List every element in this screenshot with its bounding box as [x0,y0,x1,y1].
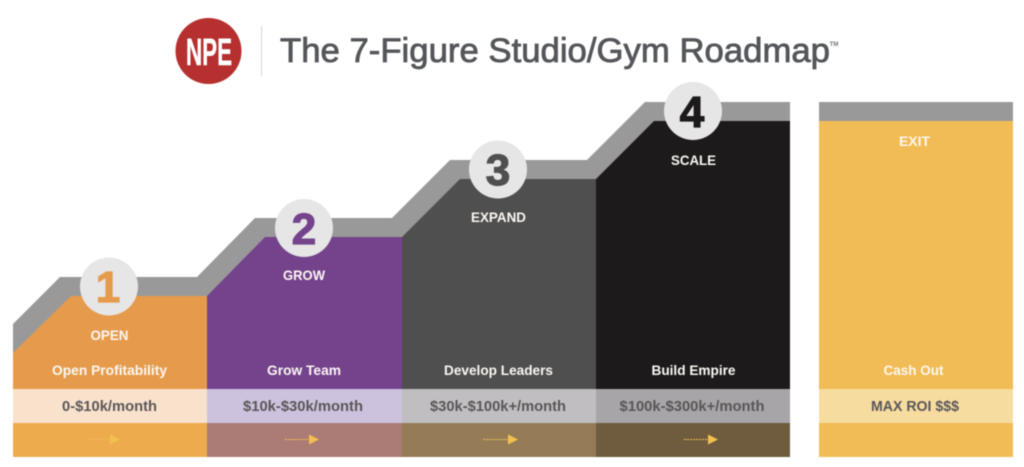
step 3 arrow row [402,423,596,457]
exit bottom row [819,423,1013,457]
step 3 subheading: Develop Leaders [444,362,553,378]
logo: NPE red circle: NPE [186,32,232,74]
panel: step 1 open [13,296,207,457]
step 3 revenue row [402,389,596,423]
exit grey cap [819,102,1013,121]
step 3 heading: EXPAND [471,209,526,225]
panel: exit [819,102,1013,457]
panel: step 2 grow [207,237,402,457]
step 3 main block [402,179,596,389]
title: The 7-Figure Studio/Gym Roadmap [280,32,830,70]
step 2 revenue: $10k-$30k/month [243,398,363,415]
step 4 revenue: $100k-$300k+/month [620,398,764,415]
staircase grey band [13,102,790,400]
step 2 revenue row [207,389,402,423]
step 2 arrow row [207,423,402,457]
badge: number 3 [469,140,527,198]
step 4 arrow [684,434,718,444]
step 1 main block [13,296,207,389]
exit main block [819,121,1013,389]
step 1 arrow row [13,423,207,457]
step 3 revenue: $30k-$100k+/month [430,398,566,415]
step 4 arrow row [596,423,790,457]
badge: number 4 [664,82,722,140]
step 1 heading: OPEN [90,327,128,343]
panel: step 3 expand [402,179,596,457]
step 1 revenue row [13,389,207,423]
step 1 subheading: Open Profitability [52,362,167,378]
step 4 subheading: Build Empire [652,362,736,378]
step 2 main block [207,237,402,389]
step 2 heading: GROW [283,267,326,283]
step 2 subheading: Grow Team [267,362,341,378]
badge: number 1 [80,258,138,316]
badge: number 1: 1 [96,263,120,312]
badge: number 2 [275,199,333,257]
exit ROI row [819,389,1013,423]
step 3 arrow [483,434,518,444]
step 1 arrow [88,434,120,444]
badge: number 2: 2 [292,205,316,254]
logo: NPE red circle [176,18,242,84]
header [176,18,838,84]
exit heading: EXIT [899,133,930,149]
exit ROI text: MAX ROI $$$ [871,398,960,415]
step 4 main block [596,121,790,389]
step 1 revenue: 0-$10k/month [62,398,157,415]
badge: number 3: 3 [486,146,510,195]
exit subheading: Cash Out [884,362,944,378]
badge: number 4: 4 [680,88,705,137]
step 2 arrow [285,434,319,444]
panel: step 4 scale [596,121,790,457]
step 4 revenue row [596,389,790,423]
trademark mark: TM [830,42,838,48]
step 4 heading: SCALE [671,152,716,168]
